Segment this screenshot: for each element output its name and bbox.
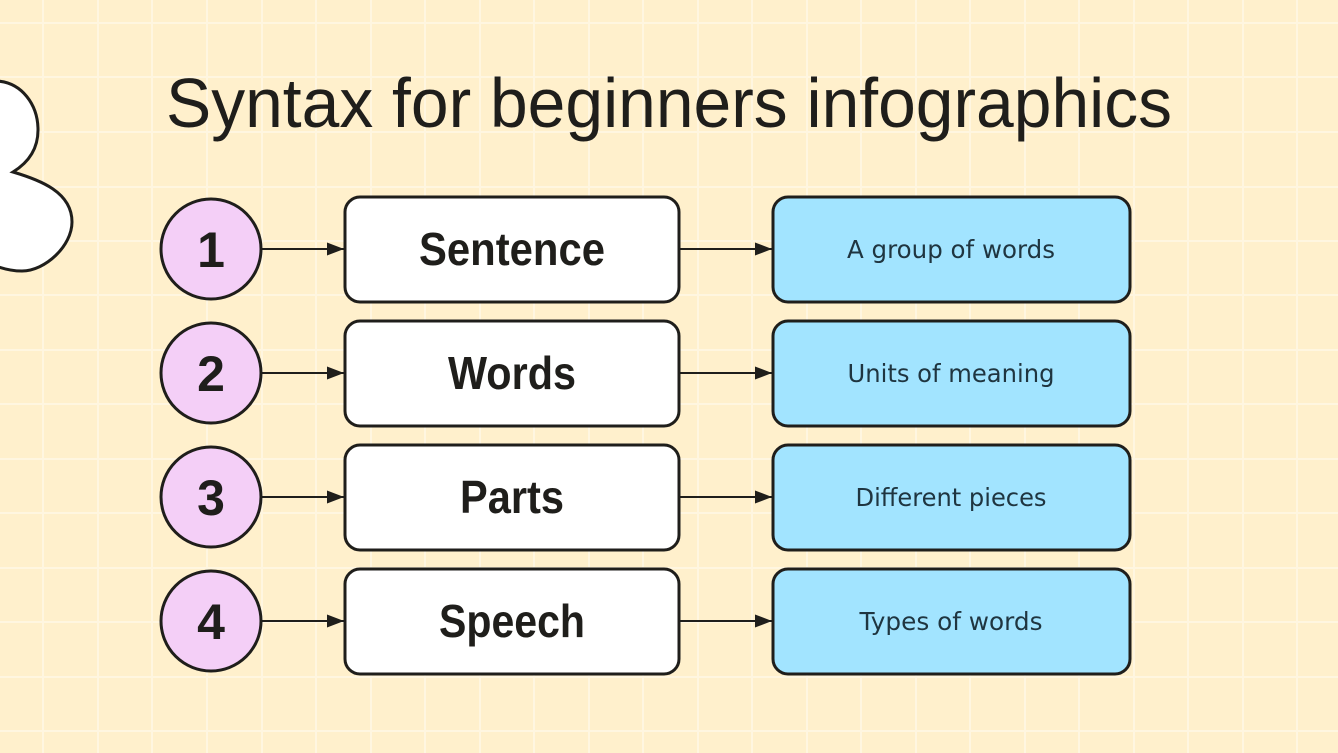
number circle 4: 4 <box>197 594 225 650</box>
number circle 1: 1 <box>197 222 225 278</box>
arrow to term 4 <box>262 620 344 622</box>
definition box 3: Different pieces <box>856 483 1046 512</box>
decorative blob shape <box>0 81 72 271</box>
row 4 <box>161 569 1130 674</box>
term box 2 <box>345 321 679 426</box>
term box 2: Words <box>448 347 576 399</box>
definition box 1 <box>773 197 1130 302</box>
definition box 1: A group of words <box>847 235 1055 264</box>
arrow to definition 3 <box>680 496 772 498</box>
definition box 2: Units of meaning <box>848 359 1054 388</box>
row 1 <box>161 197 1130 302</box>
arrow to term 3 <box>262 496 344 498</box>
term box 3: Parts <box>460 471 564 523</box>
term box 4: Speech <box>439 595 585 647</box>
number circle 4 <box>161 571 261 671</box>
number circle 1 <box>161 199 261 299</box>
arrow to term 2 <box>262 372 344 374</box>
definition box 4 <box>773 569 1130 674</box>
arrow to definition 1 <box>680 248 772 250</box>
term box 3 <box>345 445 679 550</box>
row 3 <box>161 445 1130 550</box>
arrow to term 1 <box>262 248 344 250</box>
term box 4 <box>345 569 679 674</box>
number circle 2: 2 <box>197 346 225 402</box>
number circle 3: 3 <box>197 470 225 526</box>
number circle 3 <box>161 447 261 547</box>
row 2 <box>161 321 1130 426</box>
title: Syntax for beginners infographics <box>166 64 1172 142</box>
arrow to definition 4 <box>680 620 772 622</box>
term box 1 <box>345 197 679 302</box>
number circle 2 <box>161 323 261 423</box>
arrow to definition 2 <box>680 372 772 374</box>
term box 1: Sentence <box>419 223 605 275</box>
definition box 4: Types of words <box>859 607 1042 636</box>
definition box 2 <box>773 321 1130 426</box>
definition box 3 <box>773 445 1130 550</box>
